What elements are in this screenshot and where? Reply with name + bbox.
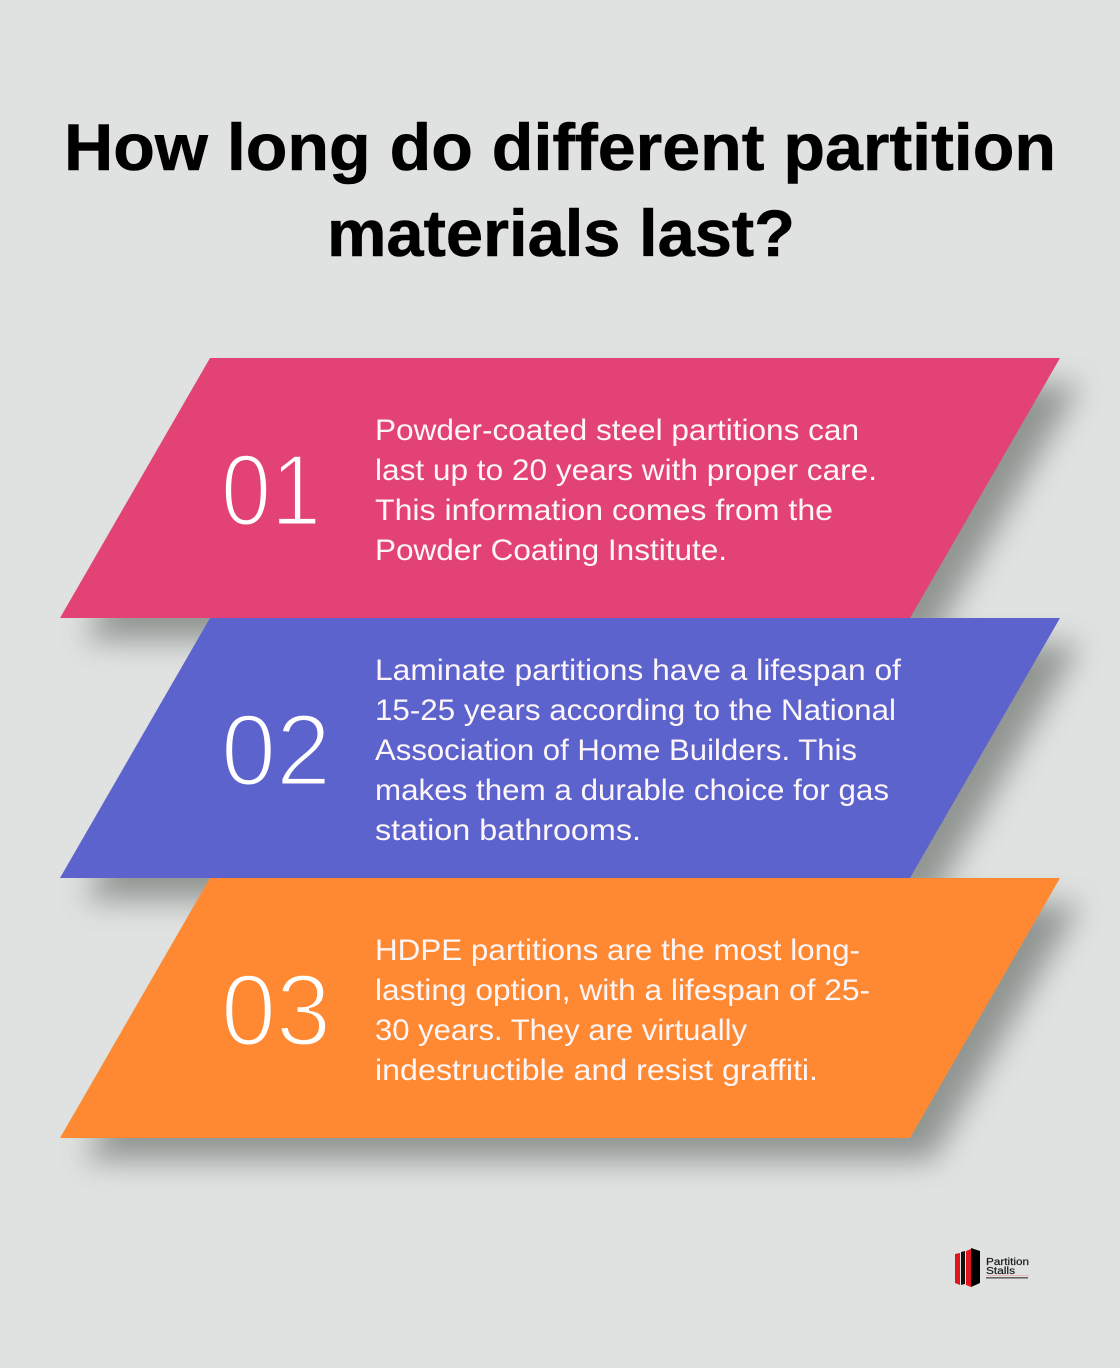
title: materials last? bbox=[327, 196, 795, 270]
text block 1: This information comes from the bbox=[375, 494, 833, 527]
logo wordmark: Stalls bbox=[986, 1266, 1015, 1277]
text block 2: Association of Home Builders. This bbox=[375, 734, 857, 767]
panel: step 3 HDPE bbox=[60, 878, 1080, 1160]
number 01: 01 bbox=[221, 435, 321, 547]
text block 2 bbox=[375, 654, 902, 847]
logo wordmark: Partition bbox=[986, 1257, 1029, 1268]
panel: step 2 laminate bbox=[60, 618, 1080, 900]
text block 3: 30 years. They are virtually bbox=[375, 1014, 747, 1047]
icon: partition stalls bbox=[955, 1248, 980, 1287]
text block 1 bbox=[375, 414, 877, 567]
text block 2: Laminate partitions have a lifespan of bbox=[375, 654, 902, 687]
text block 1: Powder Coating Institute. bbox=[375, 534, 727, 567]
logo: Partition Stalls bbox=[955, 1248, 1029, 1287]
title bbox=[64, 110, 1056, 270]
text block 3: lasting option, with a lifespan of 25- bbox=[375, 974, 870, 1007]
title: How long do different partition bbox=[64, 110, 1056, 184]
text block 3: HDPE partitions are the most long- bbox=[375, 934, 860, 967]
logo wordmark bbox=[986, 1257, 1029, 1277]
logo tagline bbox=[986, 1275, 1029, 1279]
text block 3: indestructible and resist graffiti. bbox=[375, 1054, 818, 1087]
card shape 2 bbox=[60, 618, 1060, 878]
text block 2: 15-25 years according to the National bbox=[375, 694, 896, 727]
text block 2: makes them a durable choice for gas bbox=[375, 774, 889, 807]
text block 1: last up to 20 years with proper care. bbox=[375, 454, 877, 487]
text block 3 bbox=[375, 934, 870, 1087]
panel: step 1 powder-coated steel bbox=[60, 358, 1080, 640]
card shape 3 bbox=[60, 878, 1060, 1138]
number 02: 02 bbox=[221, 695, 331, 807]
text block 1: Powder-coated steel partitions can bbox=[375, 414, 859, 447]
card shape 1 bbox=[60, 358, 1060, 618]
text block 2: station bathrooms. bbox=[375, 814, 641, 847]
number 03: 03 bbox=[221, 955, 331, 1067]
